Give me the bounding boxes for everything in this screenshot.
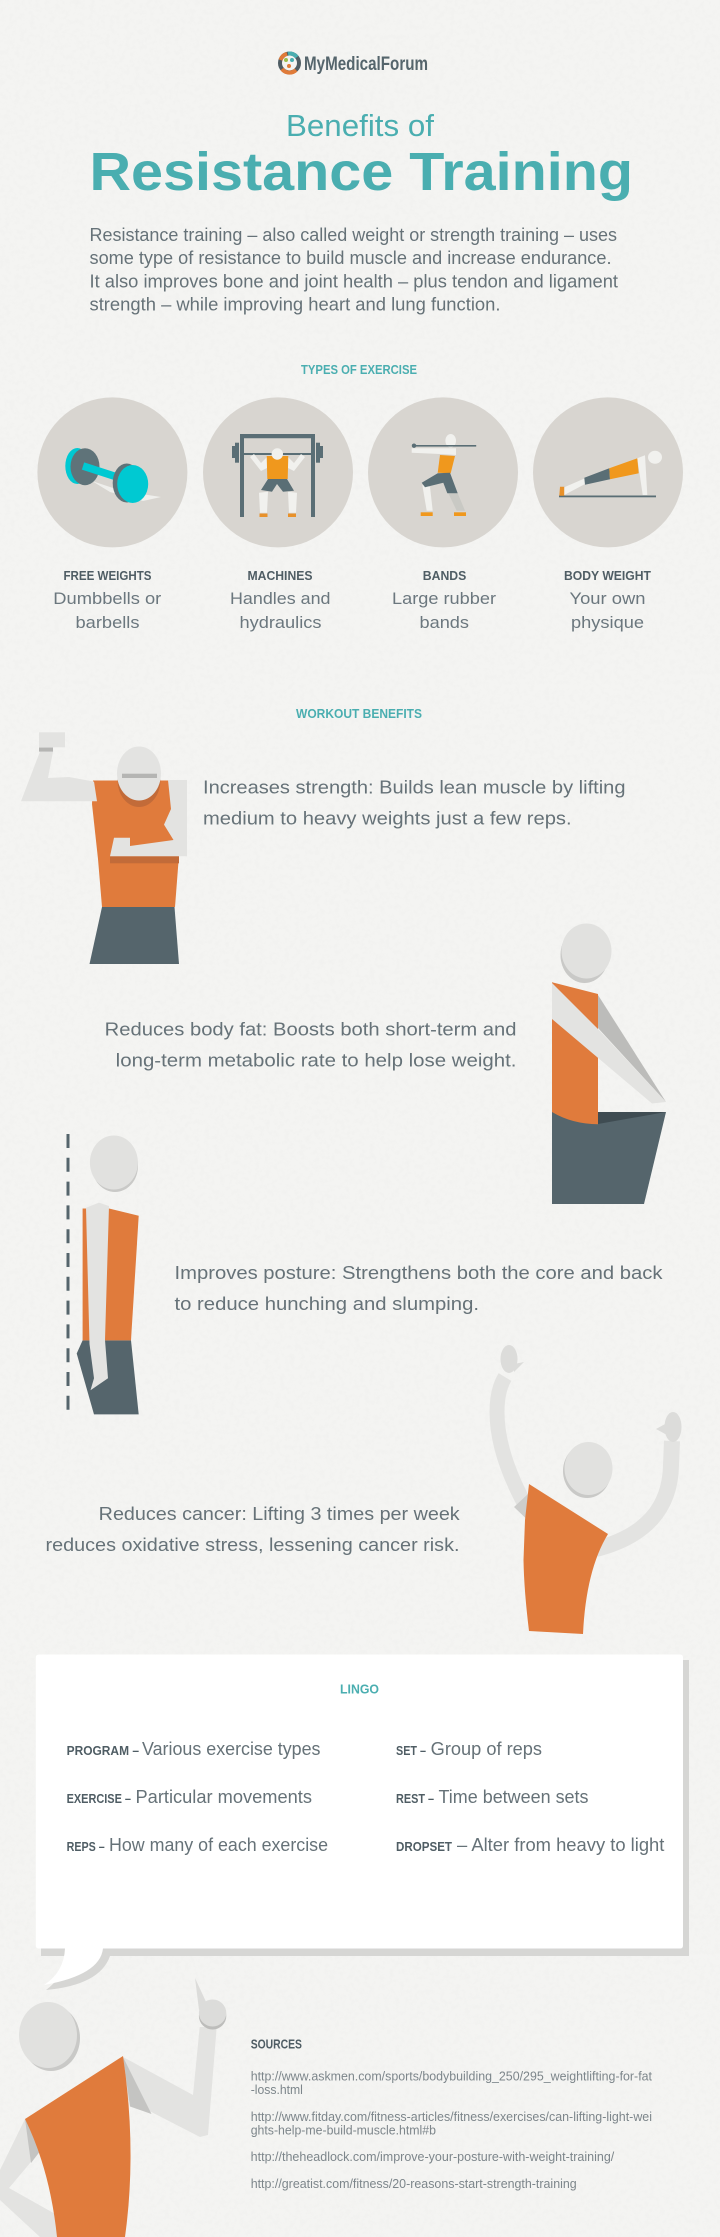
term: program — [67, 1739, 320, 1759]
text: improves posture: to reduce hunching and slumping. — [174, 1293, 479, 1314]
heading: workout benefits: WORKOUT BENEFITS — [296, 707, 422, 721]
sources list: http://theheadlock.com/improve-your-posture-with-weight-training/ — [251, 2150, 615, 2164]
term: set: Group of reps — [431, 1739, 542, 1759]
panel: machines: hydraulics — [240, 613, 322, 632]
title: Resistance Training — [90, 142, 633, 202]
intro paragraph: strength – while improving heart and lung function. — [90, 295, 500, 315]
panel: free weights: Dumbbells or — [53, 589, 162, 608]
term: reps: How many of each exercise — [109, 1835, 328, 1855]
intro paragraph: It also improves bone and joint health – plus tendon and ligament — [90, 272, 618, 292]
term: rest: REST – — [396, 1792, 434, 1806]
figure: man with loose trousers — [552, 924, 666, 1204]
text: reduces cancer: Reduces cancer: Lifting 3 times per week — [99, 1503, 460, 1524]
term: program: Various exercise types — [142, 1739, 320, 1759]
term: program: PROGRAM – — [67, 1744, 139, 1758]
icon: band squat figure in circle — [368, 397, 518, 547]
intro paragraph: some type of resistance to build muscle and increase endurance. — [90, 248, 612, 268]
text: improves posture — [174, 1262, 663, 1314]
text: increases strength: Increases strength: Builds lean muscle by lifting — [203, 777, 626, 798]
term: reps: REPS – — [67, 1840, 105, 1854]
title — [90, 108, 633, 202]
intro paragraph: Resistance training – also called weight or strength training – uses — [90, 225, 617, 245]
icon: dumbbell in circle — [37, 397, 187, 547]
figure: flexing man — [21, 732, 187, 964]
text: reduces body fat: long-term metabolic rate to help lose weight. — [116, 1050, 516, 1071]
text: increases strength — [203, 777, 626, 829]
sources list: ghts-help-me-build-muscle.html#b — [251, 2123, 436, 2137]
panel: free weights: barbells — [76, 613, 140, 632]
bubble shadow — [41, 1660, 689, 1990]
logo: MyMedicalForum — [280, 53, 428, 75]
term: exercise: Particular movements — [136, 1787, 312, 1807]
panel: body weight: Your own — [570, 589, 646, 608]
icon: plank figure in circle — [533, 397, 683, 547]
sources list: -loss.html — [251, 2083, 303, 2097]
sources list: http://www.fitday.com/fitness-articles/fitness/exercises/can-lifting-light-wei — [251, 2110, 652, 2124]
term: dropset: – Alter from heavy to light — [457, 1835, 664, 1855]
icon: squat rack figure in circle — [203, 397, 353, 547]
figure: pointing man — [0, 1978, 226, 2237]
panel: body weight: BODY WEIGHT — [564, 569, 651, 583]
panel: lingo speech bubble — [36, 1654, 689, 1990]
panel: free weights — [37, 397, 187, 632]
text: reduces body fat — [105, 1019, 516, 1071]
term: exercise: EXERCISE – — [67, 1792, 131, 1806]
bubble body — [36, 1654, 683, 1985]
icon: logo ring — [280, 53, 299, 73]
term: dropset: DROPSET — [396, 1840, 452, 1854]
panel: bands — [368, 397, 518, 632]
panel: machines: Handles and — [230, 589, 330, 608]
intro paragraph — [90, 225, 618, 315]
term: rest: Time between sets — [438, 1787, 588, 1807]
heading: lingo: LINGO — [340, 1683, 379, 1697]
sources list: http://greatist.com/fitness/20-reasons-start-strength-training — [251, 2177, 577, 2191]
sources list: http://www.askmen.com/sports/bodybuilding_250/295_weightlifting-for-fat — [251, 2070, 653, 2084]
sources list — [251, 2070, 653, 2191]
figure: man with raised arms — [497, 1345, 682, 1634]
panel: body weight: physique — [571, 613, 644, 632]
figure: straight posture man with plumb line — [68, 1134, 139, 1416]
text: reduces cancer — [46, 1503, 460, 1555]
panel: body weight — [533, 397, 683, 632]
text: increases strength: medium to heavy weights just a few reps. — [203, 808, 572, 829]
panel: bands: bands — [420, 613, 469, 632]
text: reduces body fat: Reduces body fat: Boosts both short-term and — [105, 1019, 516, 1040]
panel: bands: BANDS — [423, 569, 466, 583]
text: reduces cancer: reduces oxidative stress, lessening cancer risk. — [46, 1534, 460, 1555]
title: Benefits of — [286, 108, 434, 143]
term: set: SET – — [396, 1744, 426, 1758]
panel: free weights: FREE WEIGHTS — [64, 569, 152, 583]
panel: machines — [203, 397, 353, 632]
panel: machines: MACHINES — [248, 569, 312, 583]
heading: types of exercise: TYPES OF EXERCISE — [301, 363, 417, 377]
panel: bands: Large rubber — [392, 589, 496, 608]
text: improves posture: Improves posture: Strengthens both the core and back — [174, 1262, 663, 1283]
logo: MyMedicalForum: MyMedicalForum — [304, 54, 428, 75]
heading: sources: SOURCES — [251, 2038, 302, 2052]
